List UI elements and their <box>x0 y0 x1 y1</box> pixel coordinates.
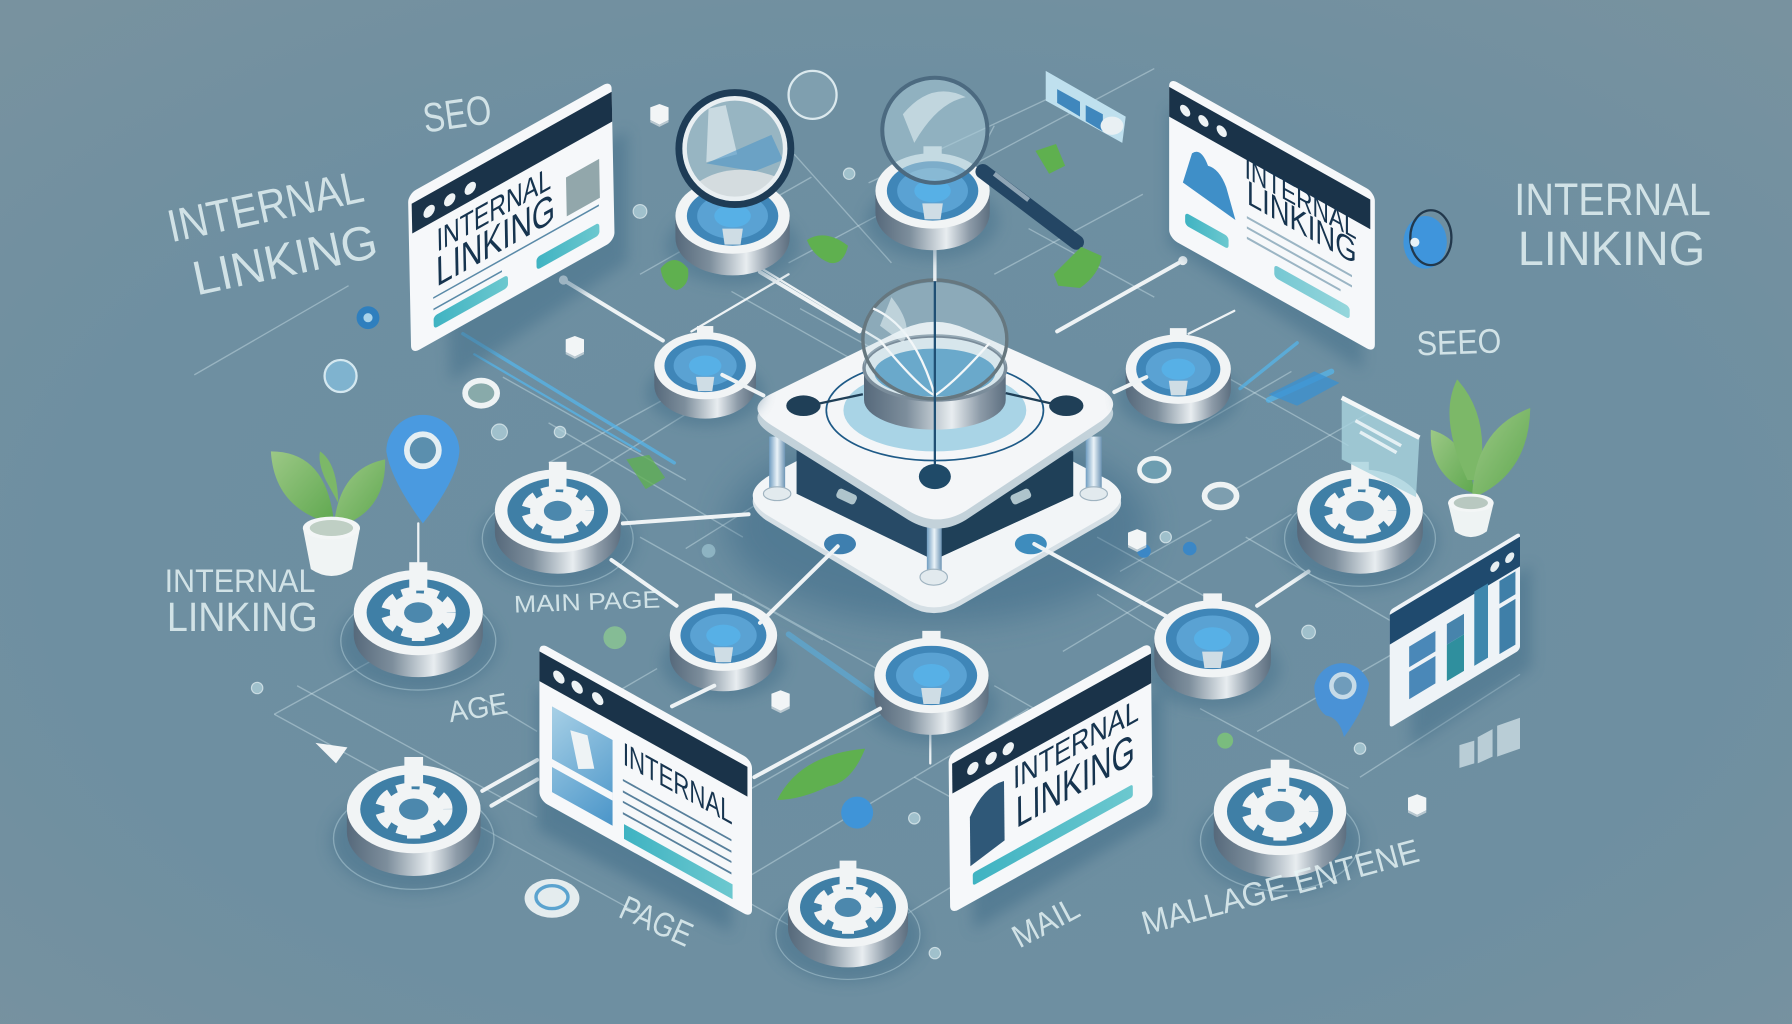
blue dots and rings <box>325 71 1237 918</box>
label: Age: AGE <box>446 687 510 729</box>
node: upper right link <box>1117 328 1239 432</box>
label: Main Page: MAIN PAGE <box>514 586 661 619</box>
label: Internal Linking upper right: LINKING <box>1518 223 1705 276</box>
browser panel: bottom left: INTERNAL <box>623 736 733 832</box>
magnifier on node: top center with handle <box>866 78 1077 259</box>
gear node: bottom far left <box>331 757 497 892</box>
gear node: far left <box>338 562 498 693</box>
blue data streaks <box>463 334 1331 695</box>
label: Internal Linking upper left <box>163 160 382 309</box>
label: Internal Linking lower left: LINKING <box>167 594 318 640</box>
blue shape near upper right node <box>1269 371 1339 406</box>
browser panel: top left: LINKING <box>436 184 555 296</box>
browser panel: top right: INTERNAL <box>1245 150 1357 246</box>
white cube accents <box>315 104 1426 817</box>
small glass droplets <box>251 168 1366 959</box>
browser panel: top right: LINKING <box>1247 173 1357 272</box>
connector lines behind hub <box>418 254 1309 806</box>
label: Internal Linking upper left: INTERNAL <box>163 161 368 252</box>
browser panel: bottom right: LINKING <box>1016 723 1135 838</box>
green leaf accents <box>603 144 1233 800</box>
label: Mallage Entene: MALLAGE ENTENE <box>1138 833 1423 943</box>
connector lines in front of nodes <box>559 256 1187 777</box>
node: lower center link <box>865 631 998 744</box>
glass info panel above right gear node <box>1342 398 1419 497</box>
icon: blue dial, top right <box>1403 210 1451 269</box>
label: Internal Linking upper right <box>1514 174 1711 276</box>
node: lower left link <box>661 594 786 700</box>
central hub platform <box>726 235 1149 623</box>
browser panel: top left: INTERNAL <box>436 160 551 260</box>
gear node: right <box>1282 462 1438 589</box>
label: SEEO: SEEO <box>1416 322 1502 363</box>
base plate <box>753 405 1121 613</box>
label: Internal Linking upper left: LINKING <box>188 215 382 306</box>
browser panel: right bar chart <box>1390 532 1531 747</box>
plant: right <box>1431 379 1530 537</box>
dark server box <box>797 400 1073 560</box>
gear node: left <box>480 462 636 589</box>
top plate <box>757 331 1113 529</box>
gear node: bottom right <box>1198 760 1362 894</box>
label: Mail: MAIL <box>1006 890 1085 955</box>
magnifying lens dome <box>863 235 1007 477</box>
label: Internal Linking lower left <box>165 563 318 640</box>
plant: left <box>271 451 385 576</box>
gear node: bottom center <box>774 861 922 982</box>
map pin: right <box>1314 663 1369 737</box>
label: SEO: SEO <box>420 86 494 141</box>
hub connection dots <box>786 393 1083 554</box>
node: upper left link <box>646 326 764 427</box>
pillars <box>769 437 785 494</box>
icon: small page blocks, top <box>1046 71 1126 143</box>
browser panel: bottom right <box>949 642 1162 930</box>
browser panel: top right <box>1168 78 1375 370</box>
browser panel: top left <box>408 80 627 382</box>
map pin: left <box>386 415 459 523</box>
browser panel: bottom left <box>537 642 752 933</box>
node: lower right link <box>1145 593 1280 709</box>
label: Internal Linking lower left: INTERNAL <box>165 563 315 599</box>
browser panel: bottom right: INTERNAL <box>1013 692 1139 797</box>
thin network grid lines <box>194 69 1520 937</box>
label: Page: PAGE <box>614 889 698 955</box>
label: Internal Linking upper right: INTERNAL <box>1514 174 1711 225</box>
icon: small bars, lower right <box>1459 718 1520 768</box>
magnifier on node: upper left <box>666 93 799 285</box>
